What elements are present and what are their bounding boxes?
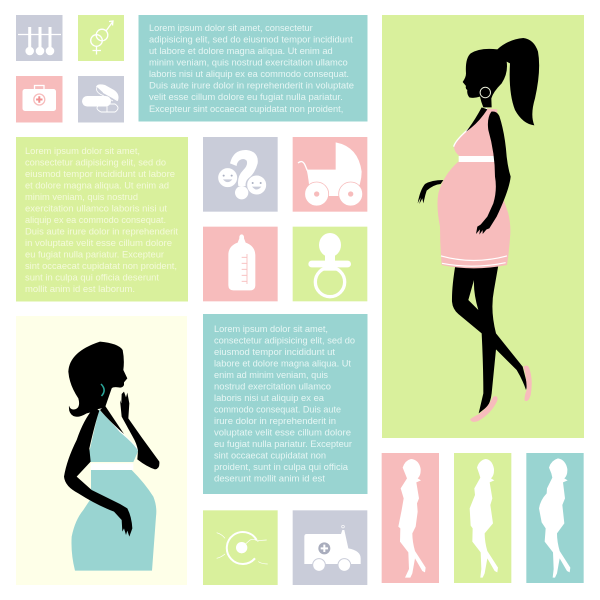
text block: lower teal (203, 314, 368, 494)
dress (437, 108, 510, 268)
earring (101, 384, 104, 396)
text block: top teal (138, 15, 368, 122)
text block: top teal: Lorem ipsum dolor sit amet, consectetur (149, 23, 313, 33)
text block: top teal: laboris nisi ut aliquip ex ea commodo consequat. (149, 69, 349, 79)
icon: baby pram (293, 137, 367, 212)
text block: green: eiusmod tempor incididunt ut labore (25, 169, 175, 179)
text block: lower teal: enim ad minim veniam, quis (214, 370, 328, 380)
text block: lower teal: commodo consequat. Duis aute (214, 404, 341, 414)
text block: top teal: Excepteur sint occaecat cupidatat non proident, (149, 104, 343, 114)
text block: lower teal: consectetur adipisicing elit, sed do (214, 336, 355, 346)
legs (452, 263, 532, 422)
text block: lower teal: sint occaecat cupidatat non (214, 450, 326, 460)
hair and face (68, 342, 127, 434)
icon: twins question mark (203, 137, 278, 212)
panel: yellow panel with woman in teal dress (16, 316, 187, 585)
text block: green: sunt in culpa qui officia deserunt (25, 272, 159, 282)
text block: green: sint occaecat cupidatat non proident, (25, 261, 177, 271)
icon: pills (78, 76, 124, 122)
text block: green: Duis aute irure dolor in reprehenderit (25, 226, 178, 236)
icon: gender symbols (78, 15, 124, 61)
text block: lower teal: eu fugiat nulla pariatur. Excepteur (214, 439, 352, 449)
text block: green: aliquip ex ea commodo consequat. (25, 215, 166, 225)
text block: top teal: ut labore et dolore magna aliqua. Ut enim ad (149, 46, 333, 56)
earring (480, 87, 490, 98)
text block: lower teal: labore et dolore magna aliqua. Ut (214, 358, 351, 368)
text block: lower teal: irure dolor in reprehenderit in (214, 416, 336, 426)
text block: green: exercitation ullamco laboris nisi ut (25, 204, 167, 214)
text block: green: eu fugiat nulla pariatur. Excepteur (25, 250, 164, 260)
text block: green: et dolore magna aliqua. Ut enim ad (25, 180, 169, 190)
text block: green: minim veniam, quis nostrud (25, 192, 138, 202)
text block: lower teal: laboris nisi ut aliquip ex ea (214, 393, 325, 403)
text block: lower teal: Lorem ipsum dolor sit amet, (214, 324, 328, 334)
text block: green: in voluptate velit esse cillum dolore (25, 238, 172, 248)
head, hair, arm (418, 38, 539, 231)
text block: green: mollit anim id est laborum. (25, 284, 135, 294)
text block: green (16, 137, 188, 302)
panel: big green panel with ponytail woman (382, 15, 584, 438)
arms (64, 392, 159, 537)
panel: teal late-pregnancy silhouette (526, 453, 584, 583)
text block: top teal: minim veniam, quis nostrud exercitation ullamco (149, 58, 348, 68)
icon: first aid kit (16, 76, 62, 122)
icon: pacifier (293, 227, 367, 301)
text block: lower teal: deserunt mollit anim id est (214, 474, 325, 484)
icon: baby bottle (203, 227, 278, 301)
text block: lower teal: nostrud exercitation ullamco (214, 382, 331, 392)
panel: pink early-pregnancy silhouette (382, 453, 439, 583)
text block: lower teal: eiusmod tempor incididunt ut (214, 347, 335, 357)
text block: top teal: Duis aute irure dolor in reprehenderit in voluptate (149, 81, 354, 91)
text block: lower teal: proident, sunt in culpa qui officia (214, 462, 349, 472)
text block: top teal: adipisicing elit, sed do eiusmod tempor incididunt (149, 34, 353, 44)
text block: green: consectetur adipisicing elit, sed do (25, 158, 166, 168)
teal dress (71, 408, 156, 571)
text block: top teal: velit esse cillum dolore eu fugiat nulla pariatur. (149, 92, 343, 102)
icon: ambulance (293, 510, 367, 585)
icon: egg and sperm (203, 510, 278, 585)
text block: green: Lorem ipsum dolor sit amet, (25, 146, 140, 156)
icon: test tubes (16, 15, 62, 61)
text block: lower teal: voluptate velit esse cillum dolore (214, 428, 351, 438)
panel: green mid-pregnancy silhouette (454, 453, 511, 583)
